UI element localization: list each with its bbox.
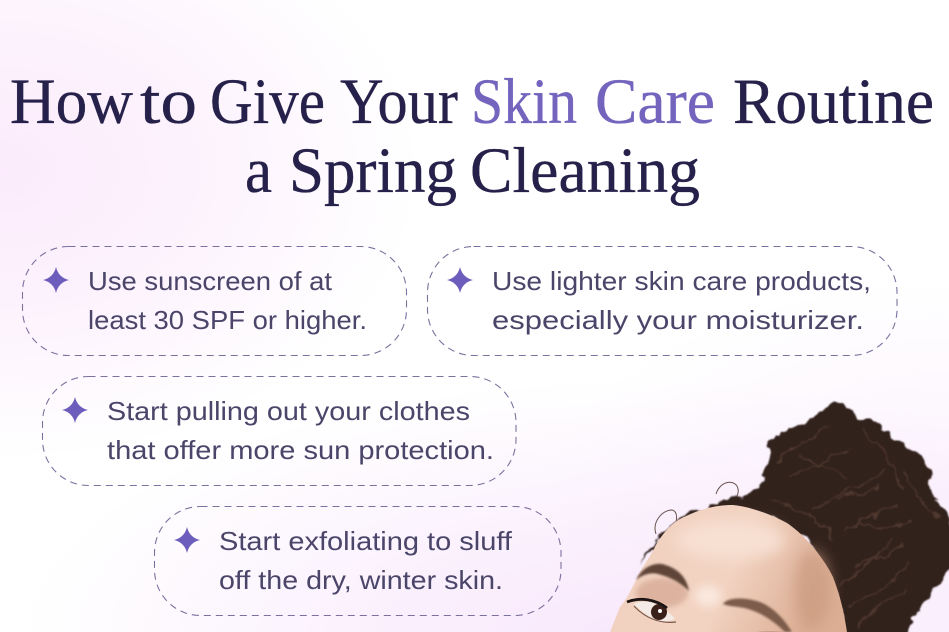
eye xyxy=(627,599,676,622)
title: How xyxy=(10,66,133,138)
panel: exfoliating tip xyxy=(154,506,561,616)
icon: sparkle xyxy=(62,397,88,423)
forehead highlight xyxy=(695,586,721,606)
forehead and skin xyxy=(610,505,847,632)
tip text: sunscreen: Use sunscreen of at xyxy=(88,266,333,296)
eye socket shadow xyxy=(636,578,688,608)
icon: sparkle xyxy=(43,267,69,293)
tip text: exfoliating: Start exfoliating to sluff xyxy=(219,526,513,556)
hair xyxy=(642,403,949,632)
tip text: sunscreen: least 30 SPF or higher. xyxy=(88,305,367,335)
title: to xyxy=(140,66,197,138)
icon: sparkle xyxy=(447,267,473,293)
left eyebrow xyxy=(636,564,689,591)
photo: woman's face with curly hair bun xyxy=(610,403,949,632)
stray curls xyxy=(655,482,738,534)
panel: clothing tip xyxy=(42,376,516,486)
lower face shadow at the bottom edge xyxy=(752,631,788,632)
hair highlights xyxy=(770,425,940,625)
tip text: lighter products: especially your moisturizer. xyxy=(492,305,864,335)
tip text: clothing: Start pulling out your clothes xyxy=(107,396,470,426)
title: Spring xyxy=(289,135,457,207)
title: Cleaning xyxy=(470,135,700,207)
tip text: lighter products: Use lighter skin care products, xyxy=(492,266,871,296)
title: Give xyxy=(210,66,325,138)
title: a xyxy=(245,135,272,207)
panel: sunscreen tip xyxy=(22,246,406,356)
tip text: clothing: that offer more sun protection. xyxy=(107,435,494,465)
icon: sparkle xyxy=(174,527,200,553)
title: Care xyxy=(595,66,715,138)
title: Routine xyxy=(733,66,934,138)
right eyebrow xyxy=(723,598,792,632)
panel: lighter products tip xyxy=(428,246,897,356)
tip text: exfoliating: off the dry, winter skin. xyxy=(219,565,503,595)
title xyxy=(10,66,934,207)
title: Skin xyxy=(471,66,577,138)
title: Your xyxy=(340,66,458,138)
